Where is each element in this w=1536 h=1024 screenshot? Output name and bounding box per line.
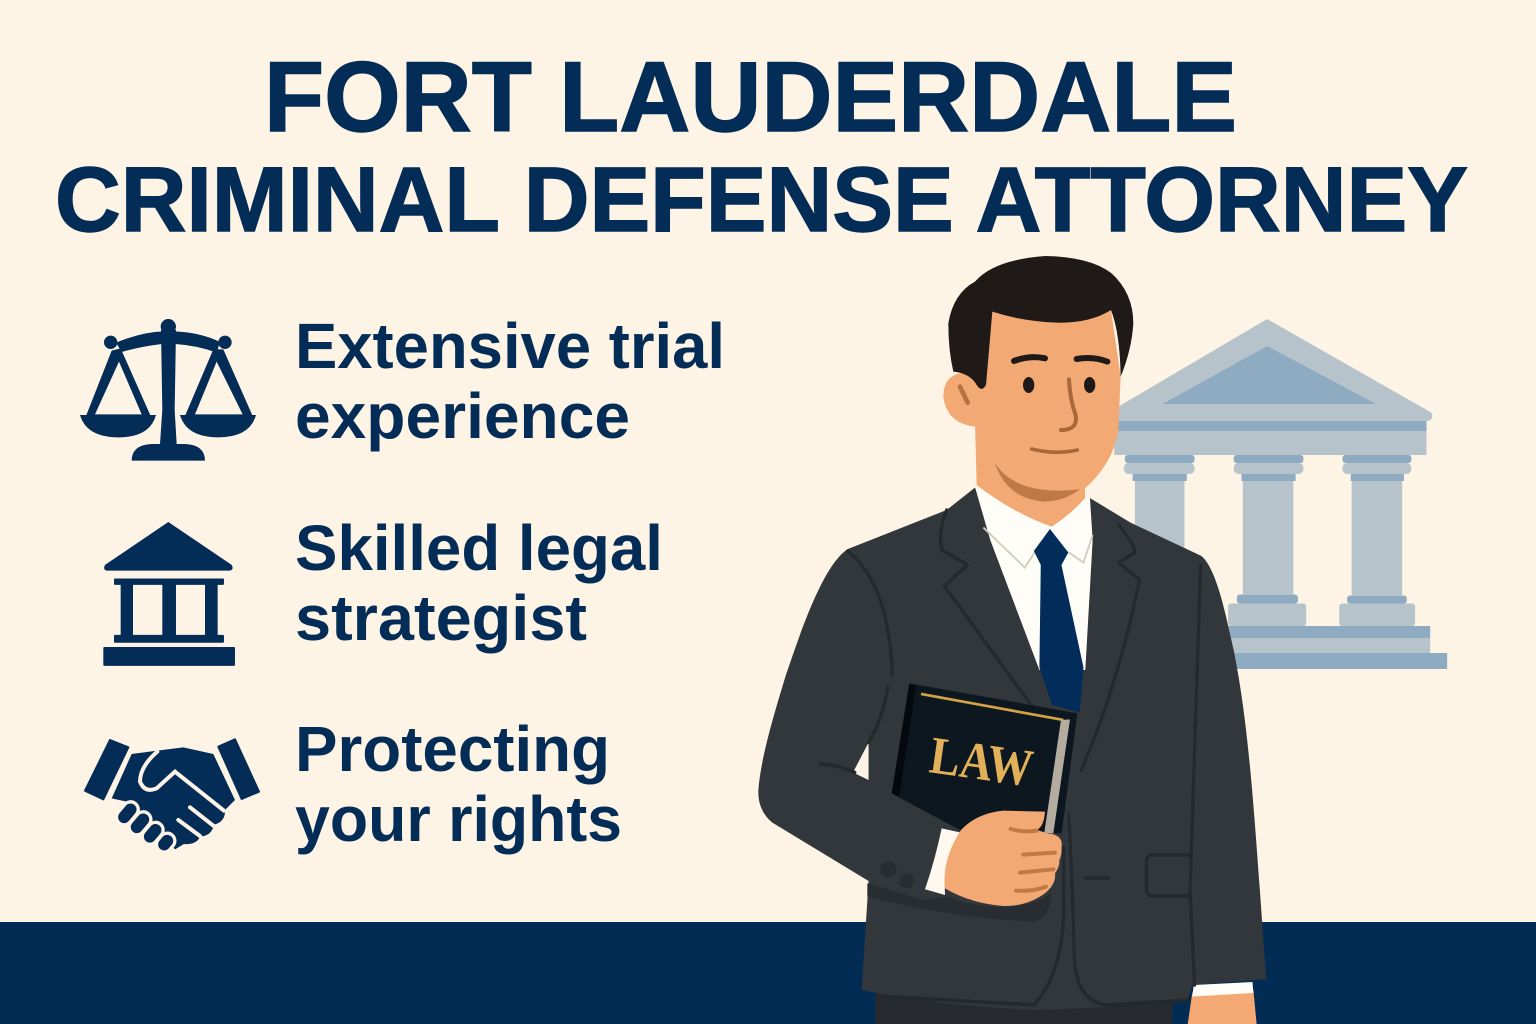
icon: handshake (85, 739, 259, 855)
text: extensive trial experience (295, 310, 725, 452)
shirt (975, 488, 1093, 670)
arm gap (853, 742, 869, 780)
sleeve shadow (867, 883, 1052, 922)
eyes (1023, 377, 1034, 393)
right hand and cuff (1188, 982, 1257, 1024)
title: FORT LAUDERDALE (264, 41, 1237, 152)
icon: courthouse (103, 522, 235, 666)
text: protecting your rights (295, 713, 622, 855)
text: protecting your rights: Protecting (295, 713, 610, 785)
mouth (1032, 449, 1077, 452)
tie (1034, 529, 1083, 712)
shirt cuff (925, 828, 961, 895)
title (55, 41, 1468, 251)
suit jacket (758, 488, 1266, 1010)
icon: scales of justice (80, 319, 256, 461)
ear (943, 373, 993, 427)
book title: LAW: LAW (926, 726, 1036, 798)
nose (1061, 379, 1076, 430)
text: extensive trial experience: Extensive trial (295, 310, 725, 382)
body in suit (758, 488, 1266, 1024)
collar (983, 528, 1093, 568)
jacket seams (820, 510, 1201, 1005)
text: extensive trial experience: experience (295, 380, 630, 452)
trousers (875, 990, 1174, 1024)
footer band (0, 922, 1536, 1024)
text: skilled legal strategist: Skilled legal (295, 512, 663, 584)
hair (948, 256, 1133, 389)
courthouse illustration (1114, 319, 1447, 669)
text: skilled legal strategist (295, 512, 663, 654)
left hand (945, 811, 1062, 906)
attorney figure (758, 256, 1266, 1024)
text: protecting your rights: your rights (295, 783, 622, 855)
head (943, 256, 1133, 527)
eyebrows (1014, 357, 1107, 362)
text: skilled legal strategist: strategist (295, 582, 587, 654)
sleeve buttons (880, 861, 914, 888)
law book (892, 683, 1077, 833)
title: CRIMINAL DEFENSE ATTORNEY (55, 149, 1468, 251)
chin shadow (995, 463, 1080, 502)
face (975, 310, 1121, 527)
book and left hand (867, 683, 1077, 922)
